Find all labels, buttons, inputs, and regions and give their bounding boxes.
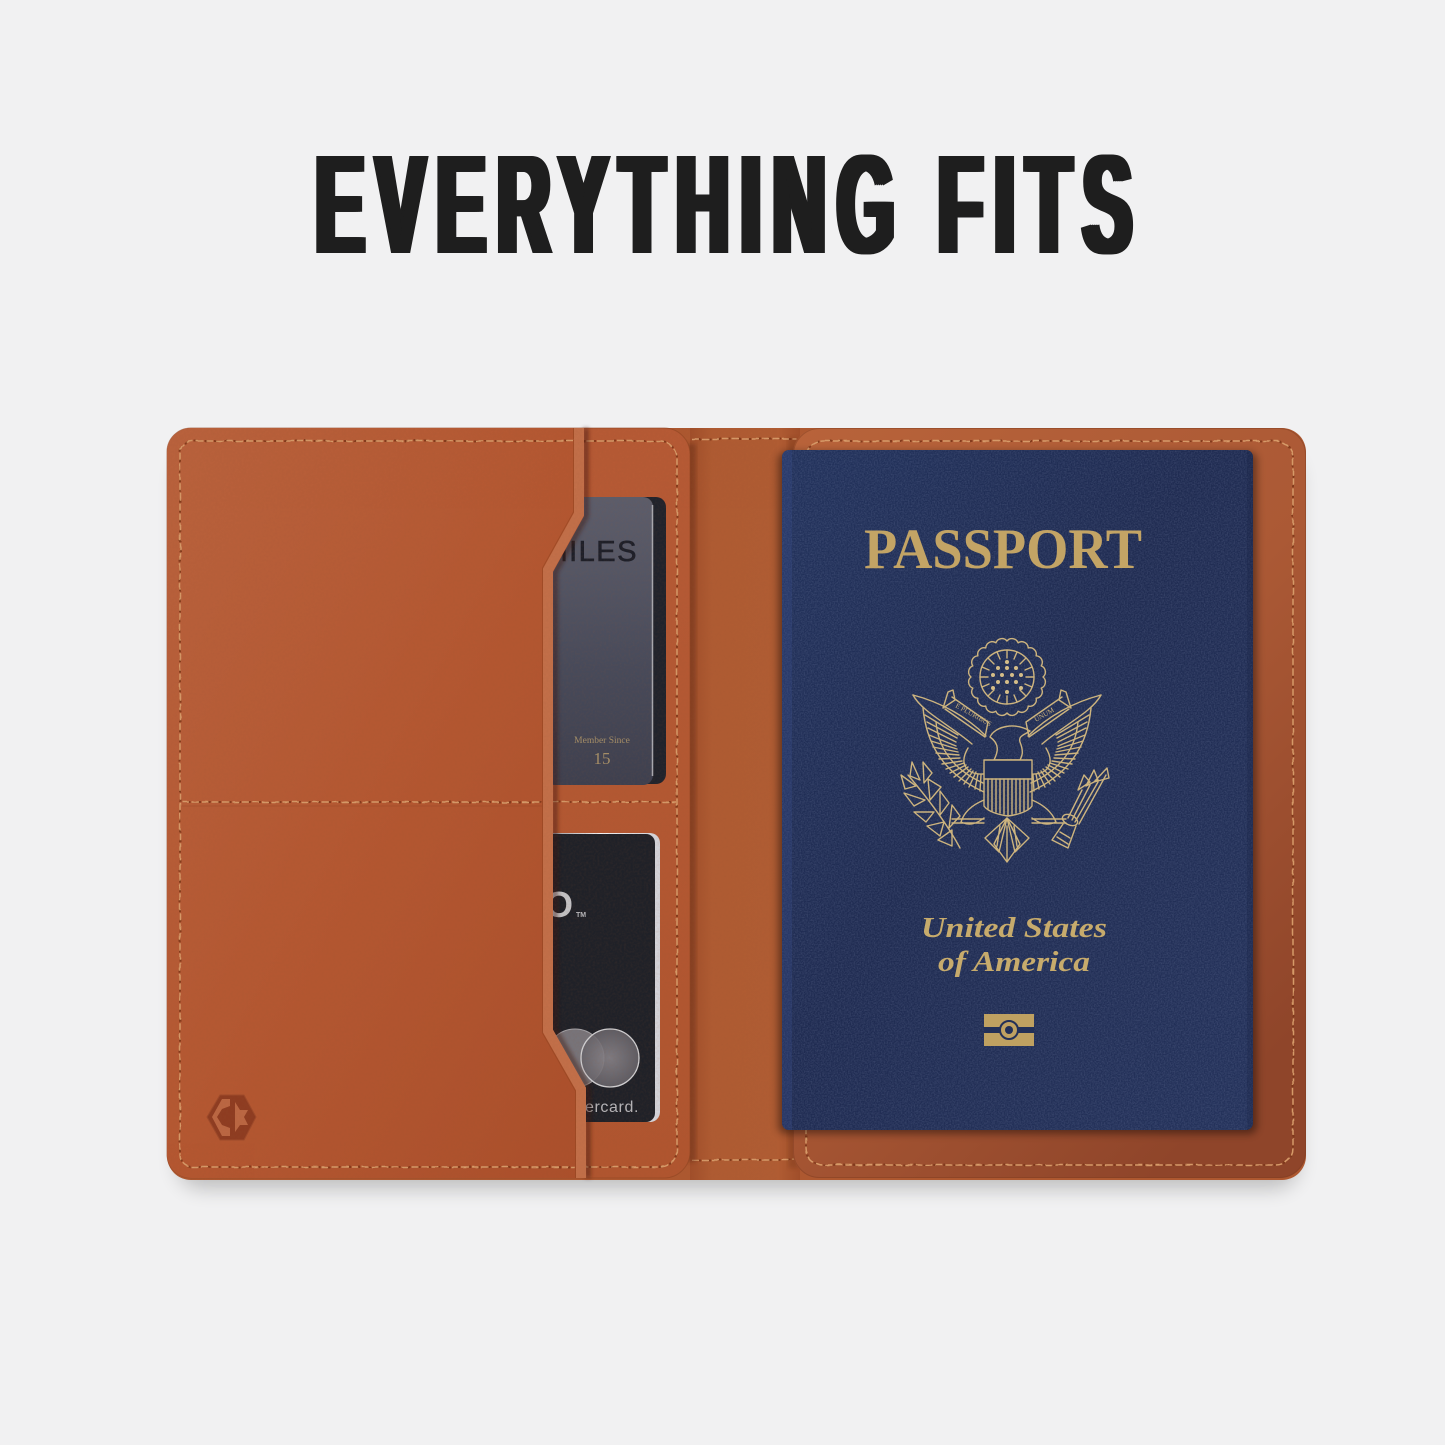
arrows (1052, 768, 1109, 848)
passport (778, 450, 1257, 1134)
shield (984, 760, 1032, 816)
scroll ribbon (943, 690, 1071, 737)
pocket stitching (180, 441, 575, 1167)
scroll ribbon: UNUM (1033, 706, 1056, 724)
right wing (1028, 695, 1101, 792)
infographic canvas (166, 425, 1308, 1198)
leather grain (553, 498, 666, 1122)
passport heading: PASSPORT (864, 518, 1142, 581)
upper loyalty card (543, 497, 666, 785)
left panel (167, 428, 696, 1178)
medallion (969, 639, 1045, 715)
right flap (788, 428, 1306, 1178)
upper loyalty card: 15 (594, 749, 610, 768)
spine stitching (692, 439, 796, 1160)
icon: embossed brand logo (207, 1095, 256, 1140)
wallet shadow (178, 455, 1298, 1188)
olive branch (901, 762, 960, 848)
eagle head (990, 726, 1030, 760)
panel stitching (180, 441, 677, 1167)
front pocket (167, 428, 586, 1178)
lower metal card: O (545, 884, 573, 925)
tail feathers (985, 818, 1029, 862)
passport country name: of America (938, 946, 1090, 978)
left wing (913, 695, 986, 792)
lower metal card (553, 833, 660, 1122)
talons (952, 800, 1066, 824)
wallet (167, 428, 1306, 1180)
biometric chip symbol (984, 1014, 1034, 1046)
lower metal card: TM (576, 912, 586, 919)
great seal emblem (901, 639, 1109, 862)
passport country name (921, 912, 1107, 978)
passport country name: United States (921, 912, 1107, 944)
right flap stitching (806, 441, 1293, 1165)
lower metal card: mastercard. (548, 1099, 639, 1116)
scroll ribbon: E PLURIBUS (954, 702, 993, 728)
spine and outer leather (167, 428, 1306, 1180)
card lettering: MILES (543, 536, 638, 568)
upper loyalty card: Member Since (574, 736, 630, 746)
title: EVERYTHING FITS (316, 124, 1144, 282)
slot shadow (555, 428, 588, 1178)
pocket cut edge (548, 428, 581, 1178)
mastercard circles (546, 1029, 604, 1087)
